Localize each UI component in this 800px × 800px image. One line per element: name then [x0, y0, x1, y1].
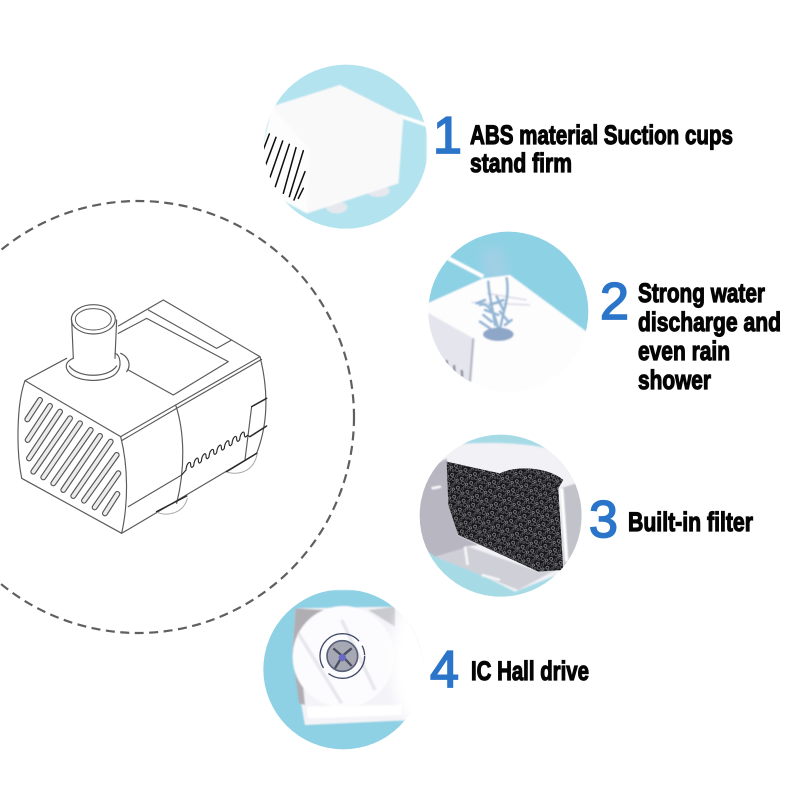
foam block — [447, 462, 563, 572]
spray haze — [482, 248, 508, 277]
blue backdrop — [260, 60, 427, 233]
white upper band — [439, 442, 576, 592]
suction feet — [326, 185, 390, 213]
water spray — [477, 278, 512, 330]
feature circle 2: water discharge — [428, 232, 588, 382]
housing box — [292, 607, 428, 725]
feature text 1: stand firm — [470, 148, 572, 178]
feature text 2 — [638, 278, 781, 395]
feature text 2: even rain — [638, 336, 730, 366]
blue backdrop — [428, 232, 588, 332]
outlet hole — [483, 328, 514, 341]
intake slots — [27, 400, 118, 513]
feature text 4: IC Hall drive — [471, 656, 589, 686]
shaft ring — [320, 634, 365, 678]
suction feet — [157, 453, 257, 514]
feature text 2: shower — [638, 365, 711, 395]
cable — [400, 116, 427, 125]
number 2: 2 — [600, 273, 629, 331]
white fade on right — [392, 618, 423, 722]
pump body outline — [18, 300, 266, 533]
feature text 1 — [470, 120, 733, 178]
cable — [448, 258, 483, 277]
feature circle 3: foam filter — [420, 434, 582, 597]
rotor disc — [292, 605, 355, 688]
number 4: 4 — [430, 641, 459, 699]
blue backdrop — [263, 590, 423, 750]
number 1: 1 — [433, 107, 462, 165]
dashed circle around pump — [0, 201, 354, 633]
dark accent lines — [157, 398, 267, 512]
blue backdrop — [428, 434, 582, 597]
feature text 3: Built-in filter — [628, 507, 753, 537]
water outlet tube — [66, 305, 129, 380]
front face with vents — [428, 313, 472, 381]
feature text 2: Strong water — [638, 278, 765, 308]
white pump top — [428, 274, 586, 392]
grey frame — [420, 458, 478, 557]
surface detail — [472, 293, 530, 305]
vent stripes — [260, 130, 305, 200]
feature circle 4: IC Hall drive — [263, 590, 423, 750]
highlights — [432, 487, 500, 580]
number 3: 3 — [589, 491, 618, 549]
pump line illustration — [18, 300, 267, 533]
white pump block — [264, 108, 311, 214]
feature circle 1: suction cups — [260, 60, 427, 233]
